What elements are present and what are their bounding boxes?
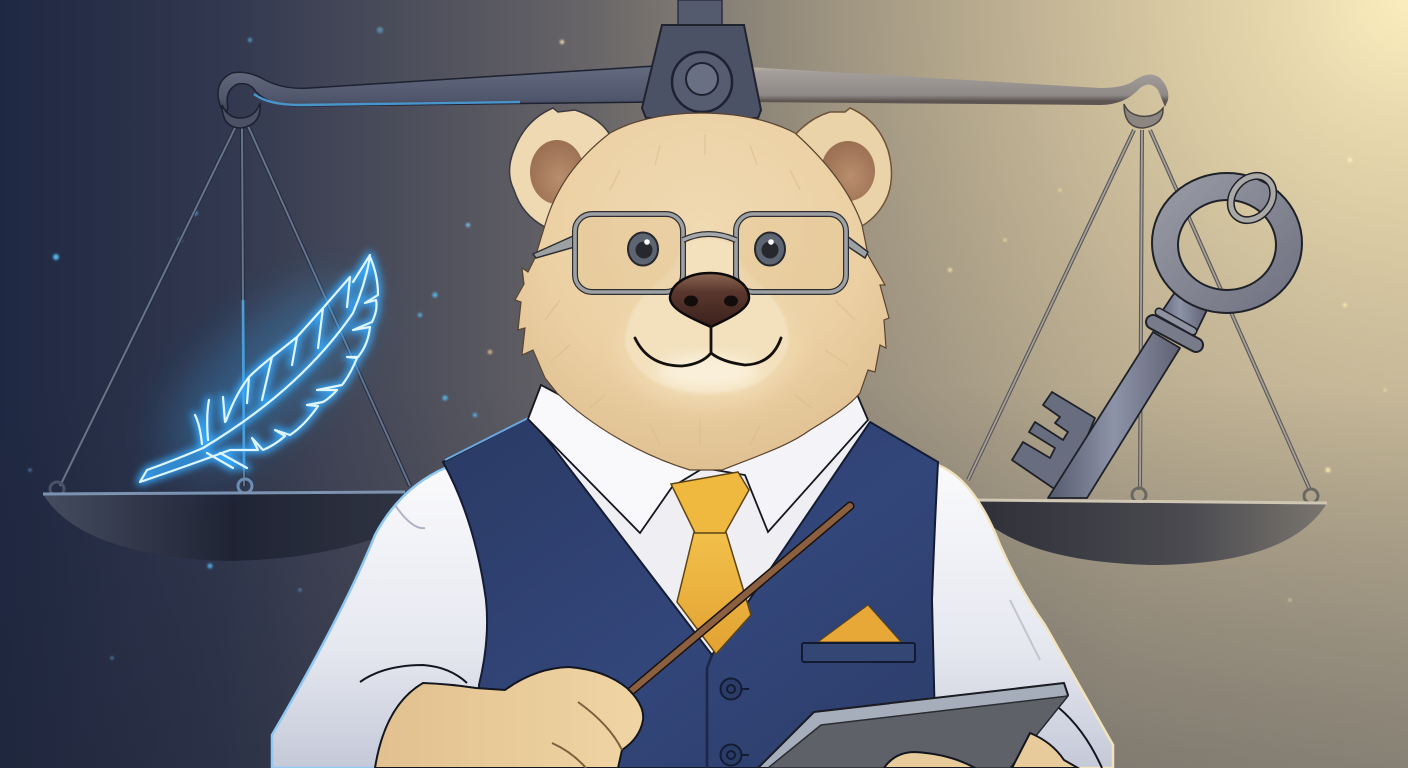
bear: left shirt sleeve [272, 468, 520, 768]
bear: head and fur [515, 113, 889, 470]
scale: right chains [968, 130, 1318, 503]
bear: smile [635, 327, 781, 366]
bear: navy vest [443, 417, 938, 768]
bear: left ear [510, 108, 610, 227]
pointer stick [630, 506, 850, 692]
bear: muzzle [625, 238, 788, 393]
bear: nose [670, 273, 749, 327]
tablet [758, 683, 1068, 768]
bear: right ear [795, 108, 892, 226]
bear: shirt collar [528, 385, 868, 533]
bear: shirt front [535, 420, 870, 660]
bear: right shirt sleeve [880, 465, 1113, 768]
sparkle particles [28, 27, 1386, 660]
scale: left pan [43, 492, 420, 561]
bear: paw under tablet [1012, 733, 1078, 768]
bear: paw holding pointer [375, 667, 643, 768]
scale: beam and pivot [218, 0, 1168, 128]
icon: glowing feather [139, 254, 391, 496]
icon: large key [1012, 167, 1302, 498]
bear: glasses [533, 214, 868, 292]
pocket square and pocket [802, 605, 915, 662]
bear: sleeve cuffs and folds [360, 505, 1102, 768]
bear: eyes [628, 232, 785, 266]
bear: gold tie [671, 472, 751, 654]
vest buttons [720, 678, 749, 766]
scale: left chains [50, 126, 410, 496]
bear: thumb over tablet [884, 752, 975, 768]
scale: right pan [975, 500, 1327, 565]
